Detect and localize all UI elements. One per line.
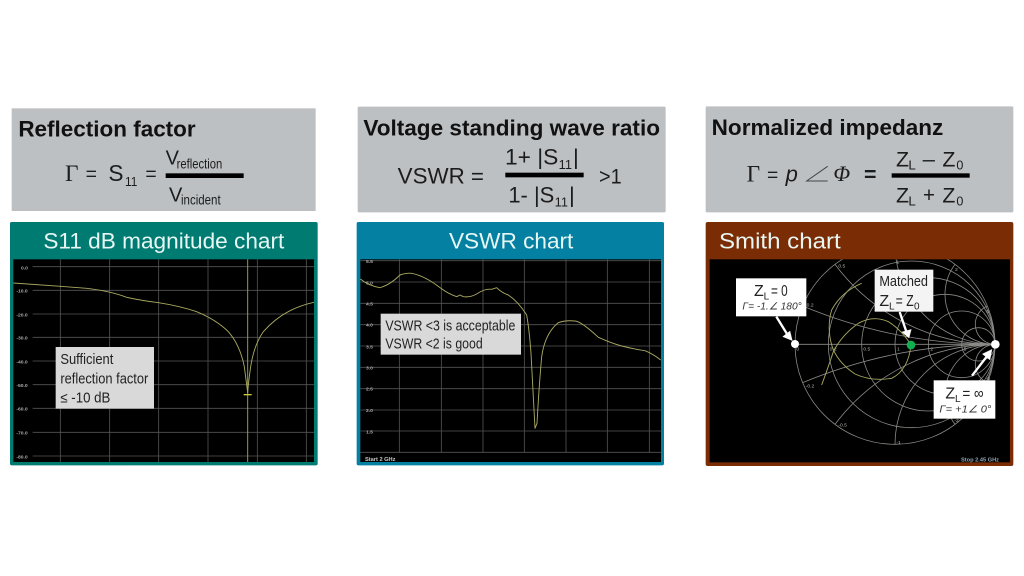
- arrow: to open circuit point: [972, 349, 992, 376]
- panel: normalized impedance formula: [706, 106, 1013, 212]
- chart: VSWR: 1.5: [366, 429, 373, 435]
- chart: S11 magnitude: -60.0: [16, 407, 28, 413]
- formula: reflection factor: =: [86, 165, 97, 186]
- heading: voltage standing wave ratio: Voltage standing wave ratio: [363, 116, 660, 141]
- formula: reflection factor: incident: [181, 191, 221, 207]
- chart: Smith chart: 1: [896, 260, 899, 266]
- curve: S11 trace: [13, 283, 314, 393]
- chart: VSWR: 2.0: [366, 408, 373, 414]
- formula: VSWR: 11: [559, 157, 572, 172]
- formula: reflection factor: 11: [125, 174, 137, 189]
- formula: VSWR: 1- |S: [508, 183, 554, 208]
- formula: reflection factor: V: [169, 185, 183, 207]
- chart: Smith chart: 5: [964, 347, 967, 353]
- formula: normalized impedance: =: [767, 166, 778, 187]
- formula: normalized impedance: Γ: [747, 162, 760, 188]
- heading: Smith chart: Smith chart: [719, 228, 842, 253]
- panel: Smith chart: [706, 222, 1013, 466]
- formula: VSWR: |: [569, 183, 575, 208]
- chart: Smith chart: -1: [896, 440, 901, 446]
- marker: matched point: [907, 341, 915, 349]
- callout: matched load: Z: [879, 293, 889, 310]
- arrow: to short circuit point: [776, 317, 792, 341]
- marker: short circuit point: [791, 340, 799, 348]
- panel: reflection factor formula: [12, 108, 316, 211]
- formula: VSWR: [398, 144, 622, 210]
- chart: S11 magnitude: -10.0: [16, 289, 28, 295]
- formula: reflection factor: V: [166, 147, 180, 169]
- chart: VSWR: 4.5: [366, 302, 373, 308]
- callout: load open: [934, 380, 995, 419]
- callout: matched load: [875, 270, 933, 312]
- callout: matched load: Matched: [879, 274, 928, 290]
- chart: VSWR: 2.5: [366, 387, 373, 393]
- formula: normalized impedance: Z: [896, 184, 909, 208]
- callout: matched load: = Z: [896, 293, 914, 310]
- formula: VSWR: |: [573, 144, 579, 169]
- callout: matched load: L: [889, 301, 895, 312]
- formula: reflection factor: reflection: [177, 155, 222, 171]
- panel: VSWR formula: [358, 107, 666, 212]
- formula: normalized impedance: =: [864, 163, 876, 187]
- formula: normalized impedance: p: [785, 162, 798, 187]
- chart: S11 magnitude: -30.0: [16, 336, 28, 342]
- callout: VSWR thresholds: VSWR <3 is acceptable: [385, 319, 515, 335]
- chart: S11 magnitude: -80.0: [16, 454, 28, 460]
- curve: Smith trace: [822, 283, 911, 385]
- chart: Smith chart: -2: [954, 418, 959, 424]
- formula: normalized impedance: –: [923, 147, 935, 171]
- callout: load open: = ∞: [962, 386, 984, 403]
- callout: load short: Γ= -1.∠ 180°: [742, 301, 802, 312]
- formula: normalized impedance: Z: [942, 184, 955, 208]
- heading: VSWR chart: VSWR chart: [449, 228, 574, 253]
- callout: sufficient reflection factor: reflection factor: [60, 371, 149, 387]
- chart: Smith chart: 2: [930, 347, 933, 353]
- chart: Smith chart: -5: [986, 376, 990, 382]
- formula: reflection factor: =: [145, 165, 157, 186]
- chart: S11 magnitude: -70.0: [16, 431, 28, 437]
- callout: VSWR thresholds: VSWR <2 is good: [385, 336, 483, 352]
- callout: load short: = 0: [771, 283, 788, 300]
- formula: reflection factor: Γ: [65, 161, 78, 187]
- formula: normalized impedance: +: [923, 183, 935, 207]
- formula: VSWR: 11: [555, 195, 568, 210]
- heading: reflection factor: Reflection factor: [18, 117, 196, 142]
- chart: Smith chart: 0.2: [807, 302, 814, 308]
- label: start frequency: Start 2 GHz: [365, 457, 396, 463]
- callout: load short: [736, 278, 806, 316]
- chart: VSWR: 3.0: [366, 365, 373, 371]
- formula: normalized impedance: Z: [942, 148, 955, 172]
- chart: S11 magnitude: -40.0: [16, 359, 28, 365]
- curve: VSWR trace: [360, 273, 661, 428]
- label: stop frequency: Stop 2.45 GHz: [961, 458, 999, 464]
- panel: S11 dB magnitude chart: [10, 222, 318, 465]
- chart: VSWR: 3.5: [366, 344, 373, 350]
- callout: load open: L: [955, 394, 961, 405]
- heading: normalized impedanz: Normalized impedanz: [712, 115, 943, 140]
- formula: normalized impedance: Φ: [833, 161, 850, 186]
- chart: Smith chart: 0.2: [830, 347, 837, 353]
- chart: S11 magnitude: [13, 259, 314, 462]
- formula: reflection factor: S: [108, 160, 123, 186]
- chart: S11 magnitude: -50.0: [16, 383, 28, 389]
- callout: sufficient reflection factor: Sufficient: [60, 352, 113, 368]
- formula: VSWR: >1: [599, 164, 622, 188]
- chart: Smith chart: 0: [796, 347, 799, 353]
- marker: open circuit point: [991, 340, 1000, 349]
- callout: sufficient reflection factor: ≤ -10 dB: [60, 390, 110, 406]
- formula: VSWR: VSWR =: [398, 163, 484, 188]
- formula: normalized impedance: L: [908, 157, 916, 172]
- chart: VSWR: [360, 259, 661, 463]
- chart: VSWR: 5.0: [366, 280, 373, 286]
- formula: VSWR: 1+ |S: [505, 144, 558, 169]
- chart: VSWR: 5.5: [366, 259, 373, 265]
- callout: matched load: 0: [914, 301, 920, 312]
- chart: Smith chart: 2: [955, 267, 958, 273]
- chart: Smith chart: -0.2: [806, 384, 814, 390]
- chart: Smith chart: 0.5: [863, 347, 870, 353]
- chart: S11 magnitude: -20.0: [16, 312, 28, 318]
- formula: normalized impedance: 0: [956, 193, 963, 208]
- callout: load open: Z: [945, 386, 955, 403]
- chart: S11 magnitude: 0.0: [21, 265, 28, 271]
- callout: load short: Z: [754, 283, 764, 300]
- callout: VSWR thresholds: [381, 314, 521, 355]
- formula: normalized impedance: [747, 147, 970, 208]
- formula: reflection factor: [65, 147, 244, 207]
- chart: VSWR: 4.0: [366, 323, 373, 329]
- panel: VSWR chart: [357, 222, 664, 465]
- chart: Smith chart: 0.5: [838, 263, 845, 269]
- formula: normalized impedance: L: [908, 193, 916, 208]
- arrow: to matched point: [900, 312, 911, 338]
- chart: Smith chart: 1: [897, 347, 900, 353]
- callout: load open: Γ= +1∠ 0°: [939, 405, 991, 416]
- formula: normalized impedance: 0: [956, 157, 963, 172]
- chart: Smith chart: [710, 244, 1010, 464]
- chart: Smith chart: -0.5: [838, 422, 847, 428]
- formula: normalized impedance: Z: [896, 148, 909, 172]
- callout: sufficient reflection factor: [56, 347, 154, 409]
- callout: load short: L: [764, 291, 770, 302]
- heading: S11 chart: S11 dB magnitude chart: [43, 228, 285, 253]
- chart: Smith chart: 5: [986, 309, 989, 315]
